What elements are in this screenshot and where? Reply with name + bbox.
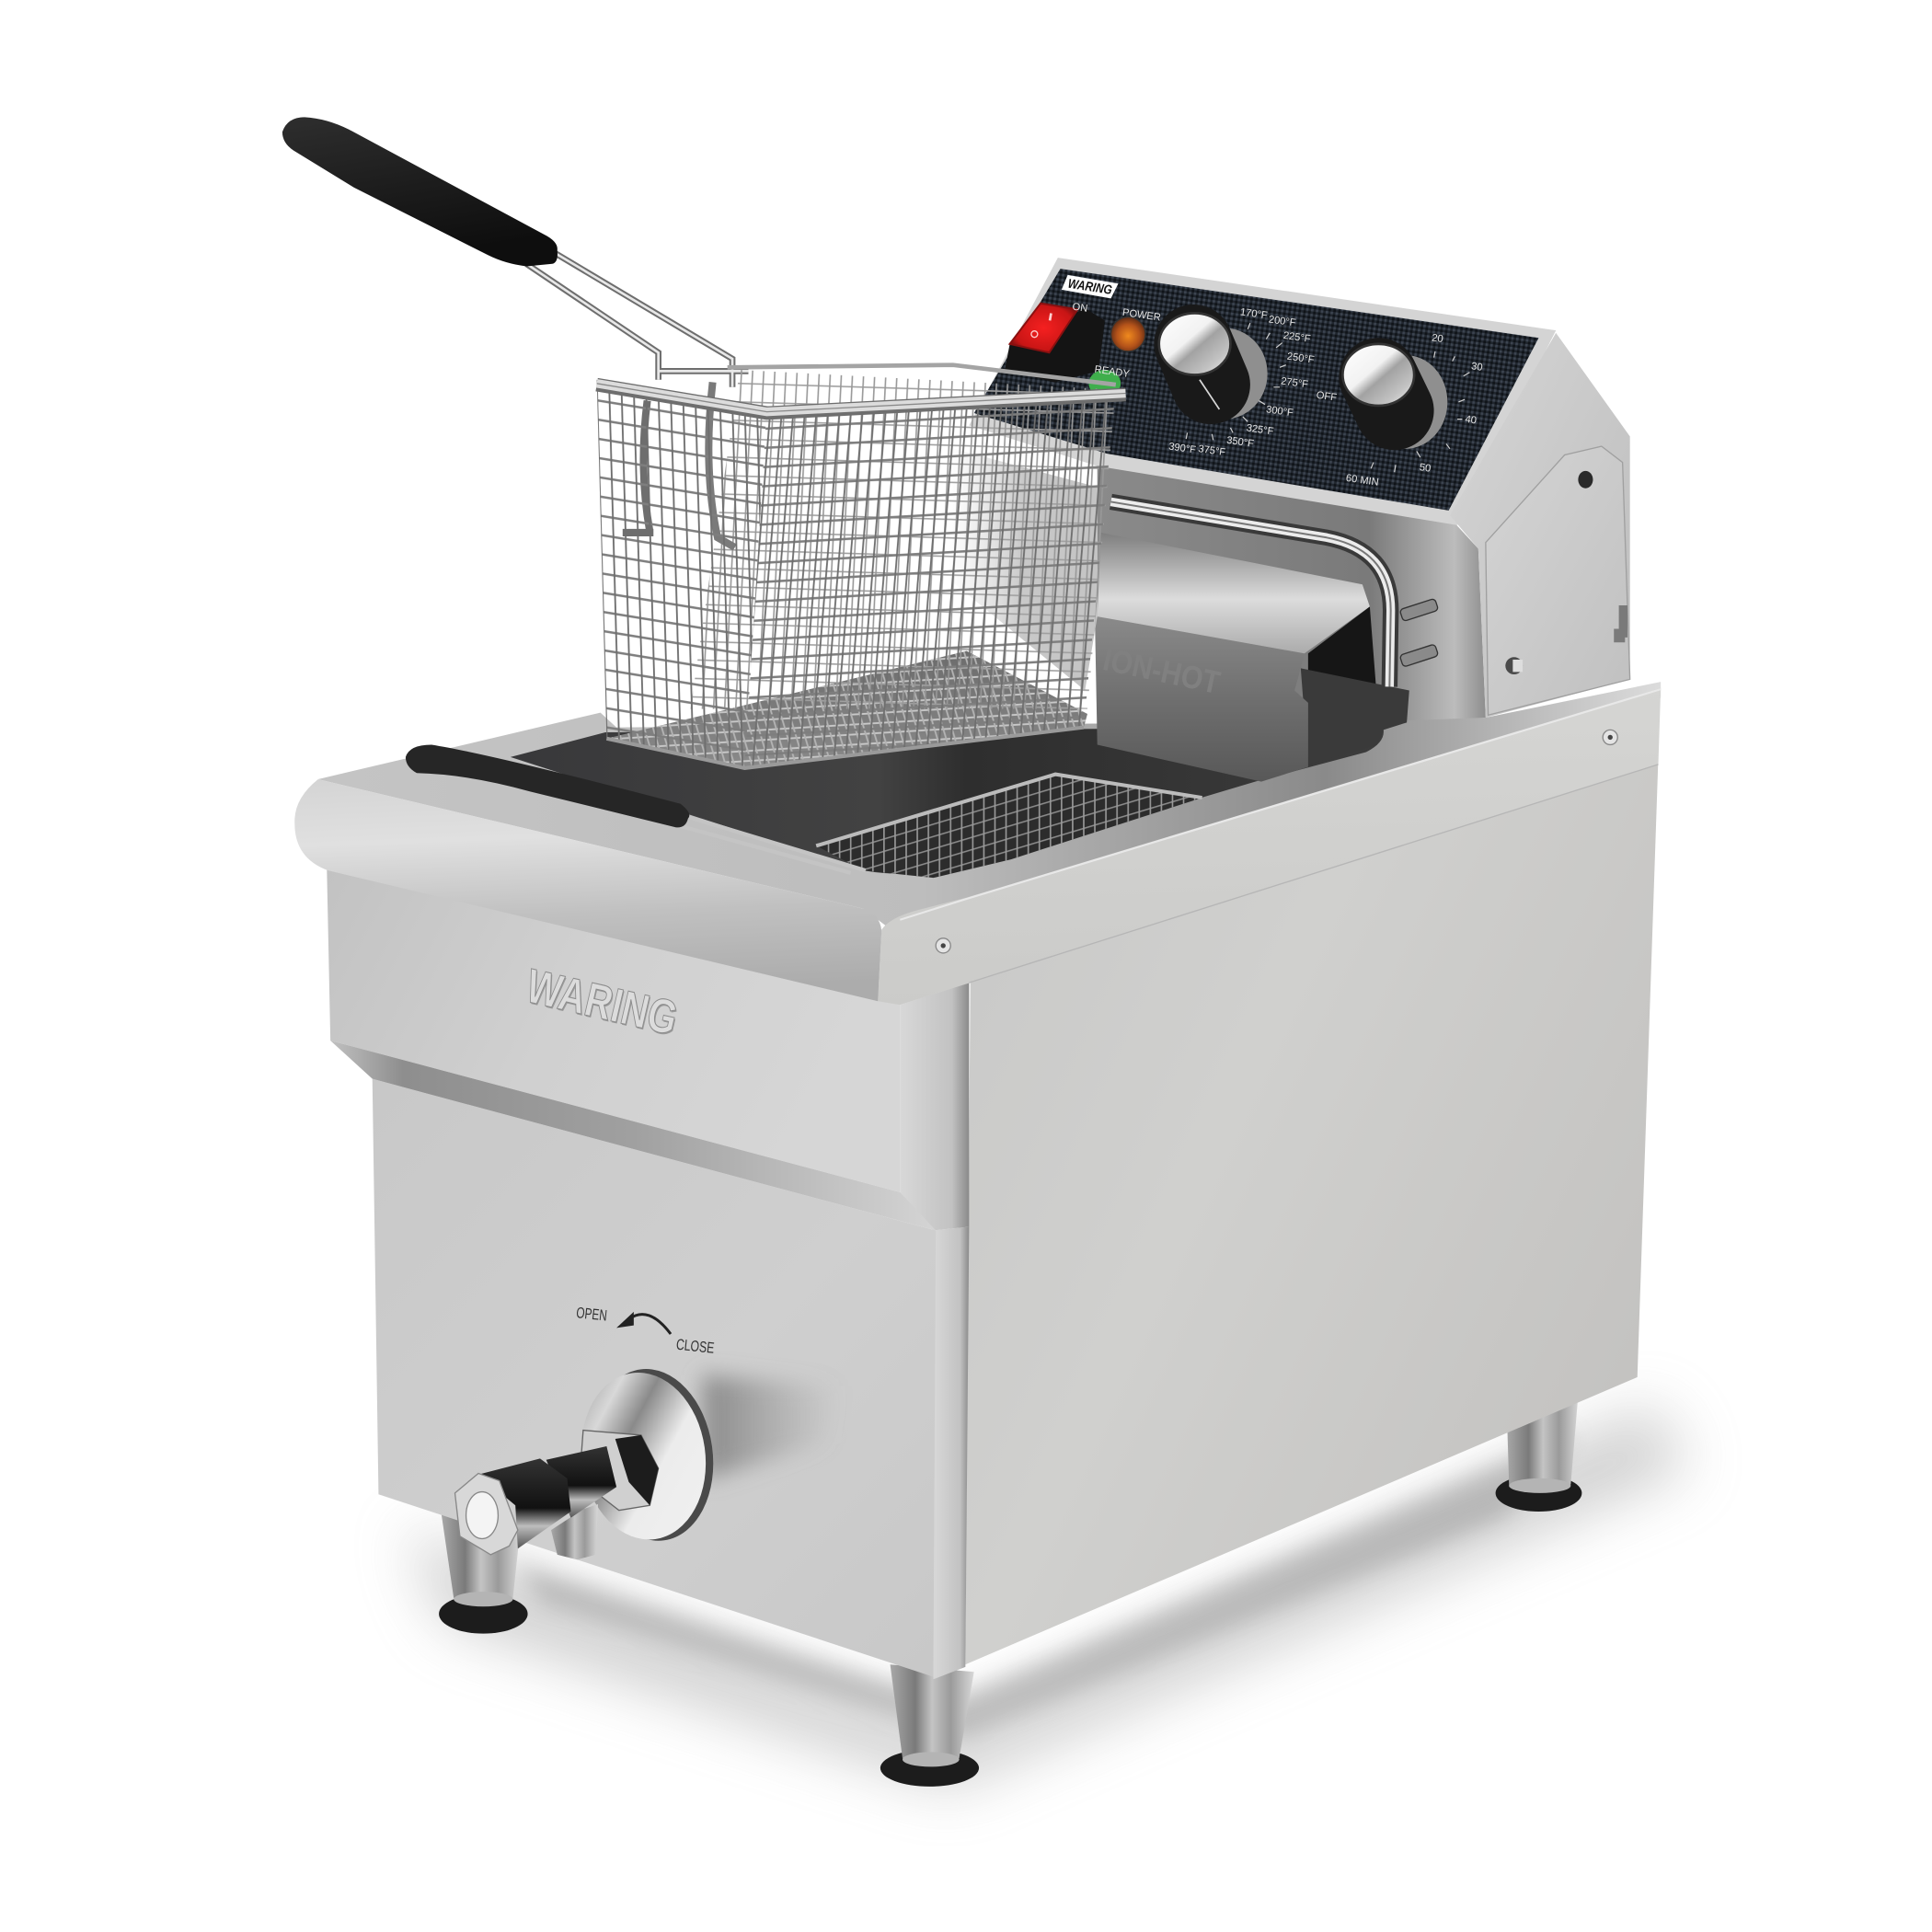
rear foot: [1496, 1381, 1581, 1512]
lower front panel: [373, 1079, 936, 1677]
left basket face: [597, 380, 767, 768]
panel labels: 20: [1432, 332, 1443, 345]
tank and heating assembly: [318, 501, 1661, 927]
panel labels: ON: [1072, 302, 1088, 315]
embossed plate: ION-HOT: [1100, 641, 1224, 701]
panel labels: 275°F: [1280, 375, 1309, 390]
panel labels: 375°F: [1198, 443, 1226, 458]
panel labels: 300°F: [1265, 404, 1294, 419]
valve flange: [581, 1361, 724, 1548]
on off rocker switch: [1010, 304, 1077, 352]
ready light: [1088, 370, 1121, 397]
open close labels: [575, 1304, 715, 1357]
front rim: [294, 779, 881, 1001]
side latch: [1614, 605, 1627, 642]
timer knob: [1342, 344, 1447, 449]
panel labels: 40: [1465, 414, 1478, 426]
valve cap face: [455, 1473, 518, 1555]
raised basket: [282, 117, 1126, 768]
panel labels: 30: [1470, 361, 1483, 374]
panel labels: OFF: [1316, 390, 1338, 404]
screw front: [936, 938, 950, 953]
dark recess block: [1301, 668, 1409, 765]
valve button: [466, 1492, 498, 1538]
open close labels: OPEN: [575, 1304, 608, 1325]
valve cap body: [478, 1458, 570, 1548]
panel labels: 225°F: [1282, 330, 1311, 345]
dial tick marks: [1186, 323, 1469, 472]
temperature knob: [1159, 313, 1268, 420]
valve pipe: [546, 1446, 616, 1518]
centre foot: [880, 1664, 979, 1787]
flange seam: [969, 765, 1658, 983]
splash plate: [1098, 533, 1370, 653]
rear mesh: [690, 370, 1116, 709]
panel labels: READY: [1094, 364, 1131, 380]
screw rear: [1603, 730, 1617, 744]
raised basket handle: [282, 117, 558, 266]
bevel: [330, 1041, 936, 1230]
upper corner strip: [900, 983, 969, 1230]
tank interior: [511, 728, 1384, 874]
panel labels: 60 MIN: [1345, 473, 1379, 489]
element bolts: [1399, 598, 1439, 667]
panel labels: 390°F: [1167, 441, 1197, 456]
left hanger bracket: [623, 401, 653, 533]
control box side plate: [1450, 333, 1630, 718]
right basket face: [744, 388, 1116, 768]
front basket handle: [406, 744, 689, 827]
panel labels: 200°F: [1268, 314, 1296, 328]
embossed waring logo: WARING: [522, 960, 683, 1046]
fryer deck: [318, 682, 1661, 927]
control box: [969, 258, 1630, 728]
bottom wire frame: [606, 728, 1084, 768]
on off rocker switch body: [1005, 308, 1105, 382]
panel labels: 50: [1419, 462, 1432, 475]
flange highlight line: [900, 689, 1661, 920]
embossed plate: [1095, 616, 1308, 782]
valve nozzle: [551, 1504, 598, 1559]
basket floor seen through mesh: [606, 651, 1087, 768]
panel labels: POWER: [1121, 307, 1161, 324]
valve reflection: [703, 1374, 838, 1479]
basket interior see-through: [949, 447, 1098, 690]
front basket wires: [681, 816, 866, 873]
back rim: [728, 365, 1116, 385]
side hole: [1578, 471, 1593, 489]
front basket floor: [816, 775, 1202, 878]
turn direction arrow: [616, 1312, 671, 1334]
right hanger bracket: [708, 382, 735, 547]
open close labels: CLOSE: [675, 1336, 715, 1357]
fryer body: [294, 688, 1661, 1679]
raised basket handle wires: [526, 251, 748, 387]
right side panel: [965, 758, 1658, 1664]
embossed waring logo: WARING: [523, 961, 684, 1048]
left foot: [439, 1514, 528, 1634]
heating element tube: [1110, 501, 1391, 686]
waring panel logo: WARING: [1067, 276, 1113, 297]
floor shadow: [407, 1406, 1689, 1788]
black recess under element: [1308, 606, 1376, 685]
control panel surround: [969, 258, 1556, 525]
front basket mesh: [816, 775, 1202, 878]
side flange: [878, 688, 1661, 1005]
drain valve: [455, 1304, 724, 1559]
power light: [1110, 316, 1145, 351]
panel labels: 350°F: [1225, 435, 1255, 450]
panel labels: [1072, 302, 1483, 489]
panel labels: 170°F: [1239, 306, 1269, 321]
front rim of basket: [597, 385, 1126, 413]
panel labels: 250°F: [1286, 351, 1315, 366]
front basket: [406, 744, 1202, 878]
control box rear housing: [1098, 463, 1486, 728]
front basket rim: [816, 775, 1202, 845]
valve hex nut: [580, 1431, 659, 1511]
control box inner side plate: [1486, 446, 1630, 715]
side lug: [1505, 657, 1523, 674]
upper front panel: [327, 863, 900, 1192]
lower corner strip: [933, 1226, 969, 1679]
panel labels: 325°F: [1246, 422, 1274, 437]
control panel face: [974, 269, 1538, 511]
